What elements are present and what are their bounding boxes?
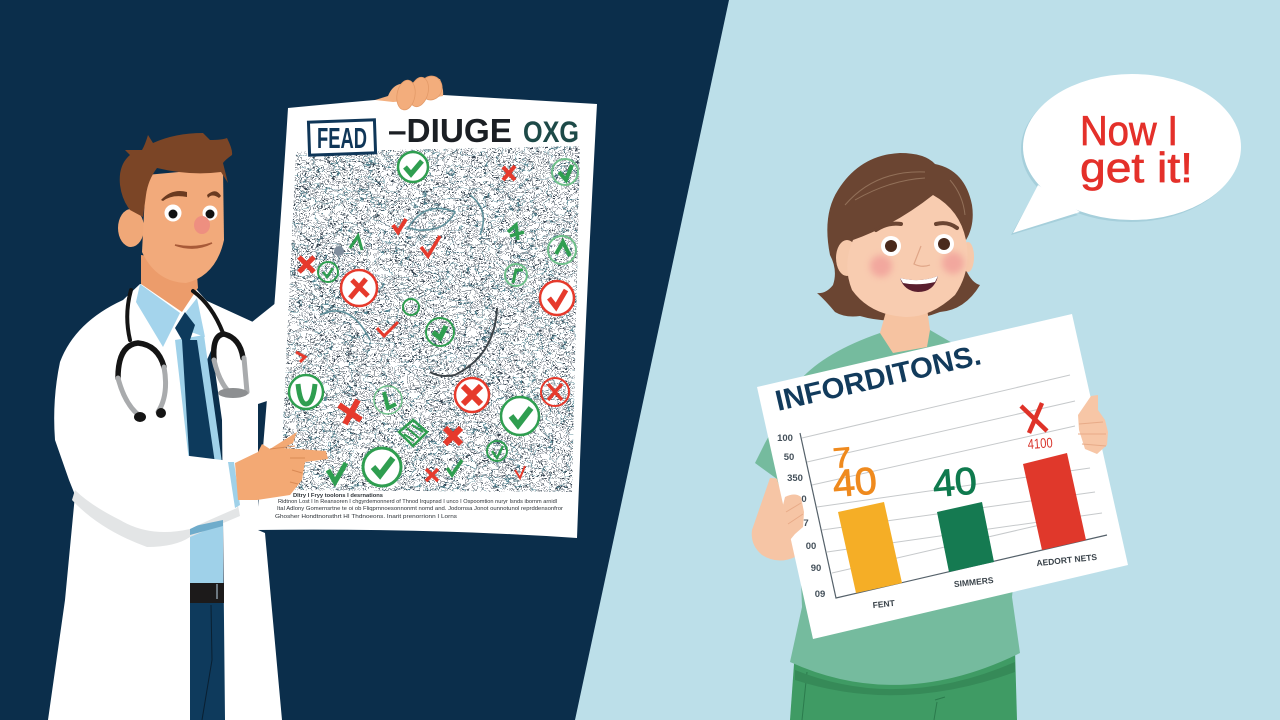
paper fine print <box>275 493 563 520</box>
doctor ear <box>118 209 144 247</box>
y axis labels: 09 <box>815 589 825 600</box>
bubble text: Now I <box>1080 107 1178 154</box>
paper headline suffix: OXG <box>523 116 579 149</box>
category labels: SIMMERS <box>953 575 994 589</box>
doctor face <box>142 168 224 283</box>
y axis labels: 00 <box>806 541 816 552</box>
category labels: FENT <box>872 598 896 610</box>
y axis labels: 90 <box>811 563 821 574</box>
doctor raised arm sleeve <box>225 298 282 450</box>
shirt shadow under sleeve <box>190 520 223 535</box>
doctor nose <box>194 216 210 234</box>
doctor forearm sleeve <box>60 440 237 532</box>
simple chart sheet <box>757 314 1128 639</box>
patient ears <box>836 240 974 276</box>
y axis labels: 100 <box>777 433 793 444</box>
doctor sleeve cuff <box>228 462 240 508</box>
doctor shirt <box>175 335 223 583</box>
category labels: AEDORT NETS <box>1036 552 1098 568</box>
paper headline logo box <box>308 120 376 155</box>
patient left arm <box>752 478 808 561</box>
paper fine print: Dltry I Fryy toolons I desrnations <box>293 493 383 499</box>
bubble text: get it! <box>1080 144 1193 191</box>
green bar value: 40 <box>931 460 979 506</box>
background: dark navy side <box>0 0 729 720</box>
bubble tail <box>1013 185 1080 233</box>
bubble body <box>1023 74 1241 220</box>
category labels <box>872 552 1098 610</box>
patient eyes <box>881 234 954 256</box>
stethoscope <box>118 290 247 416</box>
doctor smile <box>175 243 212 248</box>
yellow bar value: 40 <box>831 460 879 506</box>
curved diagram lines <box>320 195 497 376</box>
yellow bar value <box>831 442 879 506</box>
doctor neck <box>141 255 198 312</box>
paper sheet <box>256 95 597 538</box>
patient neck <box>880 308 930 353</box>
paper scribble texture <box>280 146 580 492</box>
patient left hand fingers <box>783 494 804 540</box>
doctor lab coat left panel <box>48 284 224 720</box>
paper headline text: –DIUGE <box>388 112 512 149</box>
patient nose <box>914 246 930 266</box>
bar: red <box>1023 453 1086 550</box>
paper headline logo box: FEAD <box>317 123 367 155</box>
chart paper <box>757 314 1128 639</box>
bubble shadow <box>1021 76 1239 222</box>
patient teeth <box>900 276 938 284</box>
red marks <box>296 166 574 481</box>
patient eyebrows <box>876 223 957 230</box>
doctor eyebrows <box>161 191 221 201</box>
doctor top hand <box>375 74 445 111</box>
patient cheeks <box>870 252 964 277</box>
green check marks <box>289 152 578 486</box>
doctor eyes <box>164 204 218 222</box>
patient trousers <box>790 650 1017 720</box>
paper fine print: Ital Adlony Gomernsrtne te oi ob Fliqprnnoesonnonmt nomd and. Jodornsa Jonot ounnotunol reprddensonfror <box>277 506 563 512</box>
complicated paper <box>235 74 597 538</box>
bar: green <box>937 502 994 572</box>
chart grid lines <box>802 375 1102 573</box>
chart axes <box>800 433 1107 598</box>
doctor pointing hand <box>235 432 328 500</box>
patient figure <box>752 153 1030 720</box>
patient scrub top <box>755 330 1030 685</box>
chart title: INFORDITONS. <box>772 339 984 418</box>
bubble text <box>1080 107 1193 191</box>
patient mouth <box>900 276 938 292</box>
doctor trousers <box>190 590 225 720</box>
patient back hair <box>817 153 980 320</box>
y axis labels: 7 <box>803 518 809 529</box>
trouser details <box>802 672 945 720</box>
gray dot <box>334 246 344 256</box>
doctor figure <box>48 133 282 720</box>
patient face <box>847 195 968 317</box>
yellow bar value: 7 <box>832 442 852 474</box>
paper fine print: Ridtnon Lost I ln Reansoren I chgyrdemonnerd of Thnod Irqupnsd I unco I Ospoomtion nuryr Isnds ibornm arnidl <box>278 499 557 505</box>
hair highlights <box>845 172 965 215</box>
doctor sleeve shadow <box>72 490 240 547</box>
bar: yellow <box>838 502 902 593</box>
stethoscope earpieces <box>134 388 248 422</box>
patient hem shadow <box>795 662 1015 695</box>
doctor lab coat right panel <box>205 300 282 720</box>
y axis labels <box>777 433 825 600</box>
doctor tie <box>175 312 216 470</box>
patient right hand <box>1078 395 1108 454</box>
doctor shirt collar <box>136 284 205 347</box>
y axis labels: 350 <box>787 473 803 484</box>
paper fine print: Ghosher Hondtnonsthrt HI Thdnoeons. Inarit prenorrionn I Lorns <box>275 514 457 520</box>
doctor belt <box>190 583 224 603</box>
red cross <box>1021 403 1047 433</box>
doctor trouser crease <box>202 605 212 720</box>
doctor hair <box>120 133 232 217</box>
red bar value: 4100 <box>1027 434 1053 452</box>
y axis labels: 50 <box>784 452 794 463</box>
speech bubble <box>1011 74 1241 235</box>
y axis labels: 0 <box>801 494 807 505</box>
bubble tail shadow <box>1011 190 1078 235</box>
